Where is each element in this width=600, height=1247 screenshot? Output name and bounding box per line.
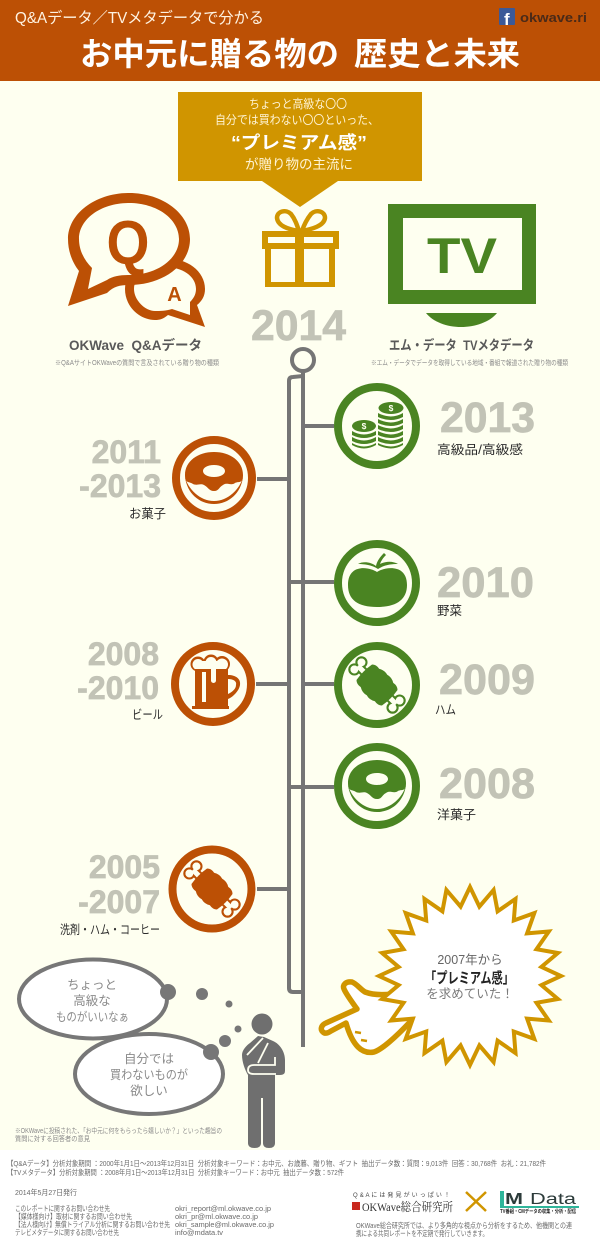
data scope: 【Q&Aデータ】分析対象期間 ：2000年1月1日～2013年12月31日 分析対象キーワード：お中元、お歳暮、贈り物、ギフト 抽出データ数：質問：9,013件 回答：30,768件 お礼：21,782件 (7, 1159, 546, 1168)
contact list: info@mdata.tv (175, 1228, 223, 1237)
icon: donut (176, 440, 252, 516)
category: 野菜 (437, 604, 462, 618)
label: OKWave Q&A data: OKWave Q&Aデータ (69, 337, 202, 353)
label: OKWave Q&A data: ※Q&AサイトOKWaveの質問で言及されている贈り物の種類 (55, 358, 219, 367)
icon: coins: $ (362, 421, 367, 431)
thought bubble: a little luxurious: 高級な (73, 993, 111, 1008)
logo: M Data: TV番組・CMデータの収集・分析・配信 (500, 1208, 576, 1215)
thought dots (196, 988, 242, 1047)
timeline (256, 349, 334, 1047)
thought bubble: something I would not buy myself: 自分では (124, 1052, 174, 1066)
letter A: A (167, 284, 182, 306)
icon: facebook (499, 8, 515, 29)
logo: M Data: M (505, 1191, 523, 1208)
contact list: このレポートに関するお問い合わせ先 (15, 1204, 110, 1213)
year: 2010 (437, 559, 534, 607)
logo: OKWave research institute (352, 1191, 453, 1214)
source note: ※OKWaveに投稿された、「お中元に何をもらったら嬉しいか？」といった趣旨の (15, 1126, 222, 1135)
year: 2009 (439, 656, 535, 704)
thought bubble: a little luxurious (19, 960, 176, 1038)
contact list: okri_pr@ml.okwave.co.jp (175, 1212, 258, 1221)
item: 2005-2007 detergent, ham, coffee: -2007 (78, 884, 160, 920)
thought bubble: something I would not buy myself (75, 1034, 223, 1114)
years: 2011 (92, 434, 161, 470)
icon: ham (338, 646, 416, 724)
label: M Data TV metadata: エム・データ TVメタデータ (389, 337, 534, 353)
icon: coins (338, 387, 416, 465)
icon: pointing hand (321, 982, 410, 1052)
footer (0, 1150, 600, 1247)
callout: premium feel (178, 92, 422, 207)
publish date: 2014年5月27日発行 (15, 1188, 77, 1197)
starburst callout: を求めていた！ (426, 987, 514, 1001)
contact list (15, 1204, 274, 1237)
callout: premium feel: 自分では買わない〇〇といった、 (215, 113, 379, 127)
starburst callout: 「プレミアム感」 (425, 969, 514, 987)
partnership note: 携による共同レポートを不定期で発行していきます。 (356, 1229, 488, 1238)
item: 2011-2013 sweets: -2013 (79, 468, 161, 504)
contact list: 【法人様向け】無償トライアル分析に関するお問い合わせ先 (15, 1220, 170, 1229)
year 2014: 2014 (251, 302, 346, 350)
icon: cross mark (466, 1192, 486, 1211)
category: ハム (435, 703, 456, 717)
data scope: 【TVメタデータ】分析対象期間 ：2008年月1日～2013年12月31日 分析対象キーワード：お中元 抽出データ数：572件 (7, 1168, 344, 1177)
main title (80, 36, 520, 72)
subtitle: Q&Aデータ／TVメタデータで分かる (15, 8, 264, 27)
TV stand (426, 313, 497, 327)
starburst callout (379, 887, 561, 1065)
facebook page name: okwave.ri (520, 11, 587, 25)
contact list: 【媒体様向け】取材に関するお問い合わせ先 (15, 1212, 132, 1221)
year: 2008 (439, 760, 535, 808)
item: 2013 luxury goods (338, 387, 535, 465)
callout: premium feel: ちょっと高級な〇〇 (249, 97, 347, 111)
years: 2005 (89, 849, 160, 885)
thought bubble: a little luxurious: ものがいいなぁ (56, 1009, 129, 1024)
label: M Data TV metadata (371, 337, 568, 367)
source note: 質問に対する回答者の意見 (15, 1134, 90, 1143)
partnership note (356, 1221, 572, 1238)
category: お菓子 (129, 507, 166, 521)
icon: beer mug (175, 646, 251, 722)
icon: facebook: f (504, 10, 510, 29)
icon: Q&A speech bubbles (68, 193, 205, 327)
main title: 歴史と未来 (354, 36, 520, 72)
logo: OKWave research institute: OKWave総合研究所 (362, 1199, 453, 1214)
logo: OKWave research institute: Q & A に は 発 見 が い っ ぱ い ！ (353, 1191, 450, 1199)
icon: thinking person (242, 1014, 285, 1148)
contact list: テレビメタデータに関するお問い合わせ先 (15, 1228, 119, 1237)
category: 洗剤・ハム・コーヒー (60, 923, 160, 937)
item: 2005-2007 detergent, ham, coffee (60, 849, 252, 937)
logo: M Data (500, 1191, 579, 1215)
label: OKWave Q&A data (55, 337, 219, 367)
contact list: okri_report@ml.okwave.co.jp (175, 1204, 271, 1213)
thought bubble: a little luxurious: ちょっと (67, 978, 117, 992)
category: 高級品/高級感 (437, 442, 524, 457)
thought bubble: something I would not buy myself: 欲しい (130, 1083, 168, 1098)
icon: TV (388, 204, 536, 327)
item: 2008 western sweets (338, 747, 535, 825)
logo: M Data: Data (530, 1191, 577, 1208)
icon: gift box (262, 211, 339, 287)
year: 2013 (440, 394, 535, 442)
item: 2010 vegetables (338, 544, 534, 622)
item: 2011-2013 sweets (79, 434, 252, 521)
item: 2009 ham (338, 646, 535, 724)
callout: premium feel: “プレミアム感” (231, 132, 367, 153)
main title: お中元に贈る物の (80, 36, 339, 72)
item: 2008-2010 beer (77, 636, 251, 722)
data scope (7, 1159, 546, 1177)
category: ビール (132, 708, 163, 722)
starburst callout: 2007年から (437, 953, 503, 967)
icon: ham (172, 850, 252, 928)
contact list: okri_sample@ml.okwave.co.jp (175, 1220, 274, 1229)
item: 2008-2010 beer: -2010 (77, 670, 159, 706)
icon: coins: $ (389, 403, 394, 413)
icon: donut (338, 747, 416, 825)
letter Q: Q (107, 209, 149, 278)
thought bubble: something I would not buy myself: 買わないものが (110, 1067, 188, 1082)
header band (0, 0, 600, 81)
category: 洋菓子 (437, 807, 476, 822)
years: 2008 (88, 636, 159, 672)
icon: tomato (338, 544, 416, 622)
icon: TV: TV (427, 228, 498, 284)
callout: premium feel: が贈り物の主流に (245, 157, 353, 172)
source note (15, 1126, 222, 1143)
